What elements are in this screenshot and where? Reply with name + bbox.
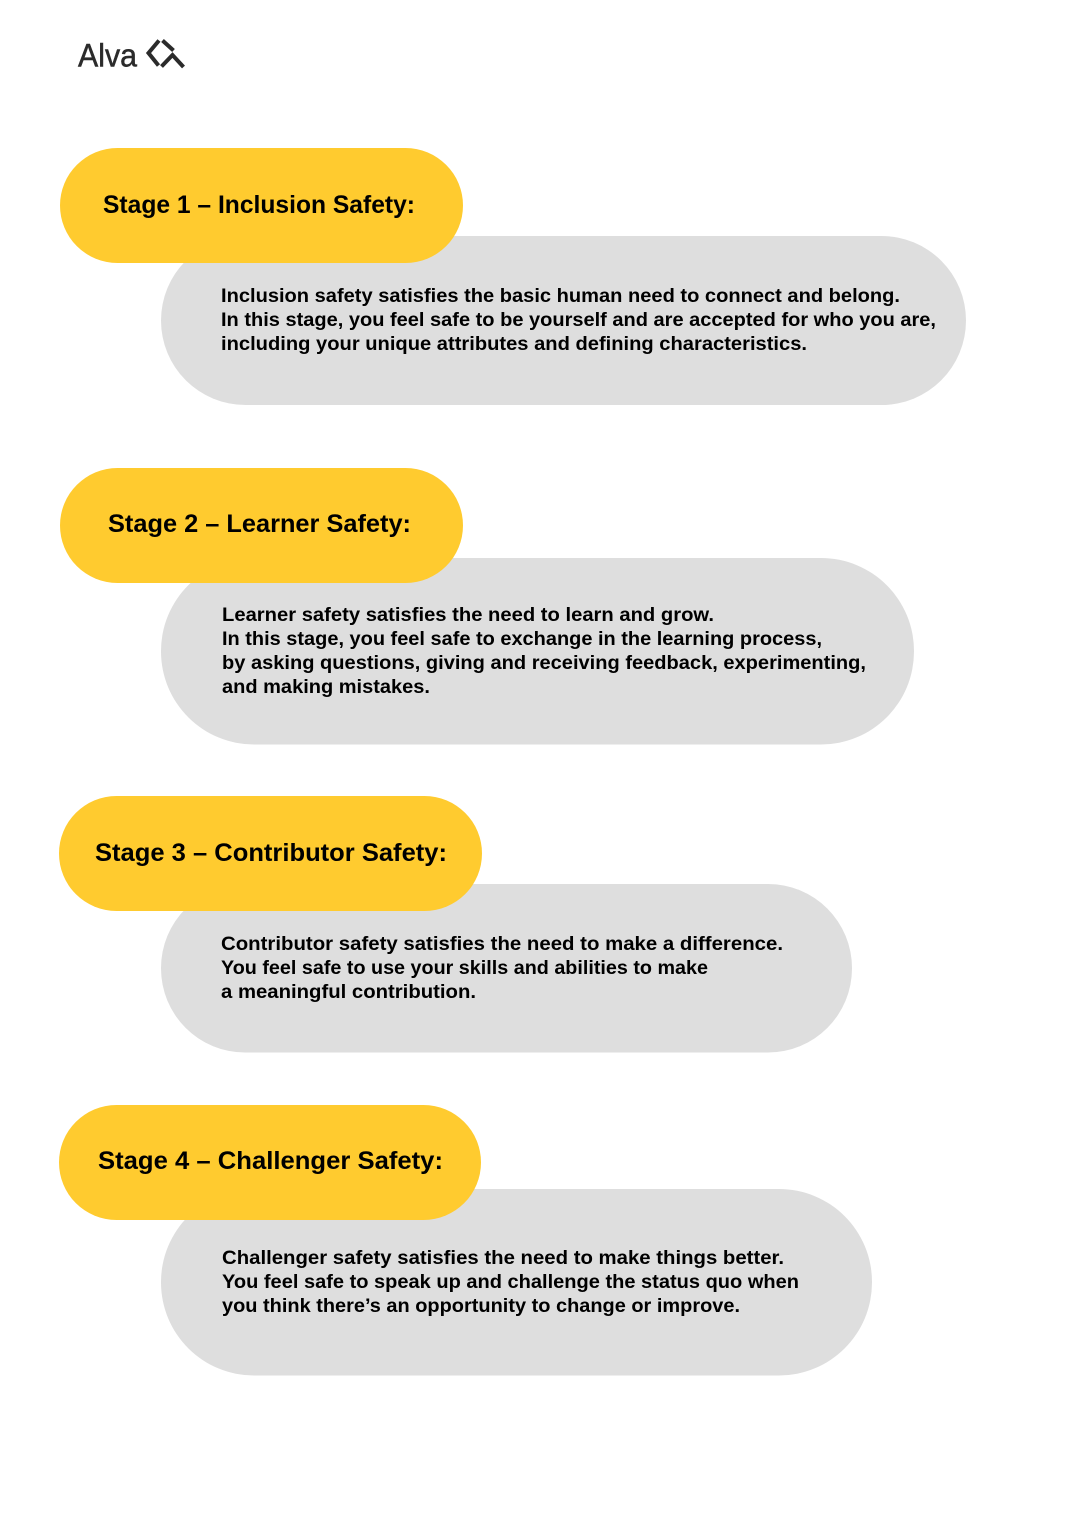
panel: stage 1 [60, 148, 966, 405]
stage 2 heading pill [60, 468, 463, 583]
stage 1 heading pill [60, 148, 463, 263]
stage 4 heading pill: Stage 4 – Challenger Safety: [98, 1147, 443, 1175]
stage 2 description pill: Learner safety satisfies the need to learn and grow. [222, 604, 714, 626]
stage 3 heading pill [59, 796, 482, 911]
panel: stage 2 [60, 468, 914, 744]
stage 2 description pill: by asking questions, giving and receiving feedback, experimenting, [222, 652, 866, 674]
panel: stage 4 [59, 1105, 872, 1376]
stage 3 description pill: a meaningful contribution. [221, 981, 476, 1003]
stage 3 heading pill: Stage 3 – Contributor Safety: [95, 839, 447, 867]
stage 1 heading pill: Stage 1 – Inclusion Safety: [103, 191, 415, 219]
stage 2 heading pill: Stage 2 – Learner Safety: [108, 510, 411, 538]
stage 4 heading pill [59, 1105, 481, 1220]
stage 4 description pill [161, 1189, 872, 1376]
stage 3 description pill [161, 884, 852, 1052]
stage 1 description pill: including your unique attributes and defining characteristics. [221, 333, 807, 355]
stage 4 description pill: Challenger safety satisfies the need to make things better. [222, 1247, 784, 1269]
stage 4 description pill: You feel safe to speak up and challenge the status quo when [222, 1271, 799, 1293]
logo wordmark: Alva [78, 38, 137, 74]
icon: Alva diamond mark [148, 40, 184, 67]
stage 1 description pill: Inclusion safety satisfies the basic human need to connect and belong. [221, 285, 900, 307]
logo: Alva [78, 38, 184, 74]
stage 3 description pill: Contributor safety satisfies the need to make a difference. [221, 933, 783, 955]
stage 4 description pill: you think there’s an opportunity to change or improve. [222, 1295, 740, 1317]
stage 2 description pill: In this stage, you feel safe to exchange in the learning process, [222, 628, 822, 650]
stage 3 description pill: You feel safe to use your skills and abilities to make [221, 957, 708, 979]
panel: stage 3 [59, 796, 852, 1052]
stage 1 description pill [161, 236, 966, 405]
stage 2 description pill [161, 558, 914, 744]
stage 1 description pill: In this stage, you feel safe to be yourself and are accepted for who you are, [221, 309, 936, 331]
stage 2 description pill: and making mistakes. [222, 676, 430, 698]
